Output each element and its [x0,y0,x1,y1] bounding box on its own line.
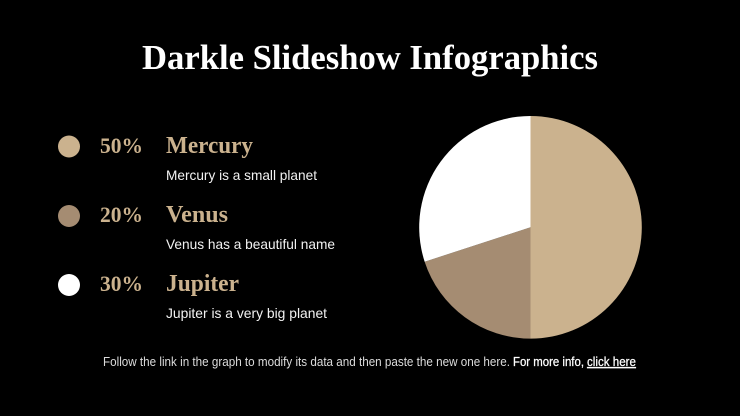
footer more info text: For more info, [513,355,584,369]
icon: Jupiter colour dot [58,274,80,296]
legend item: Mercury [58,133,317,183]
pie slice: Venus 20% [425,227,530,339]
legend item: Jupiter [58,271,327,321]
footer link: click here [587,355,636,369]
legend item: Venus [58,202,335,252]
Venus heading: Venus [166,202,228,228]
Jupiter heading: Jupiter [166,271,239,297]
icon: Venus colour dot [58,205,80,227]
footer note [103,355,636,369]
Venus description: Venus has a beautiful name [166,236,335,252]
Mercury heading: Mercury [166,133,253,159]
footer instruction text: Follow the link in the graph to modify its data and then paste the new one here. [103,355,510,369]
Venus percentage: 20% [100,202,143,227]
pie chart [419,116,642,339]
Jupiter percentage: 30% [100,271,143,296]
title: Darkle Slideshow Infographics [142,38,598,77]
Mercury percentage: 50% [100,133,143,158]
pie slice: Jupiter 30% [419,116,530,262]
icon: Mercury colour dot [58,136,80,158]
Jupiter description: Jupiter is a very big planet [166,305,327,321]
Mercury description: Mercury is a small planet [166,167,317,183]
pie slice: Mercury 50% [530,116,642,339]
